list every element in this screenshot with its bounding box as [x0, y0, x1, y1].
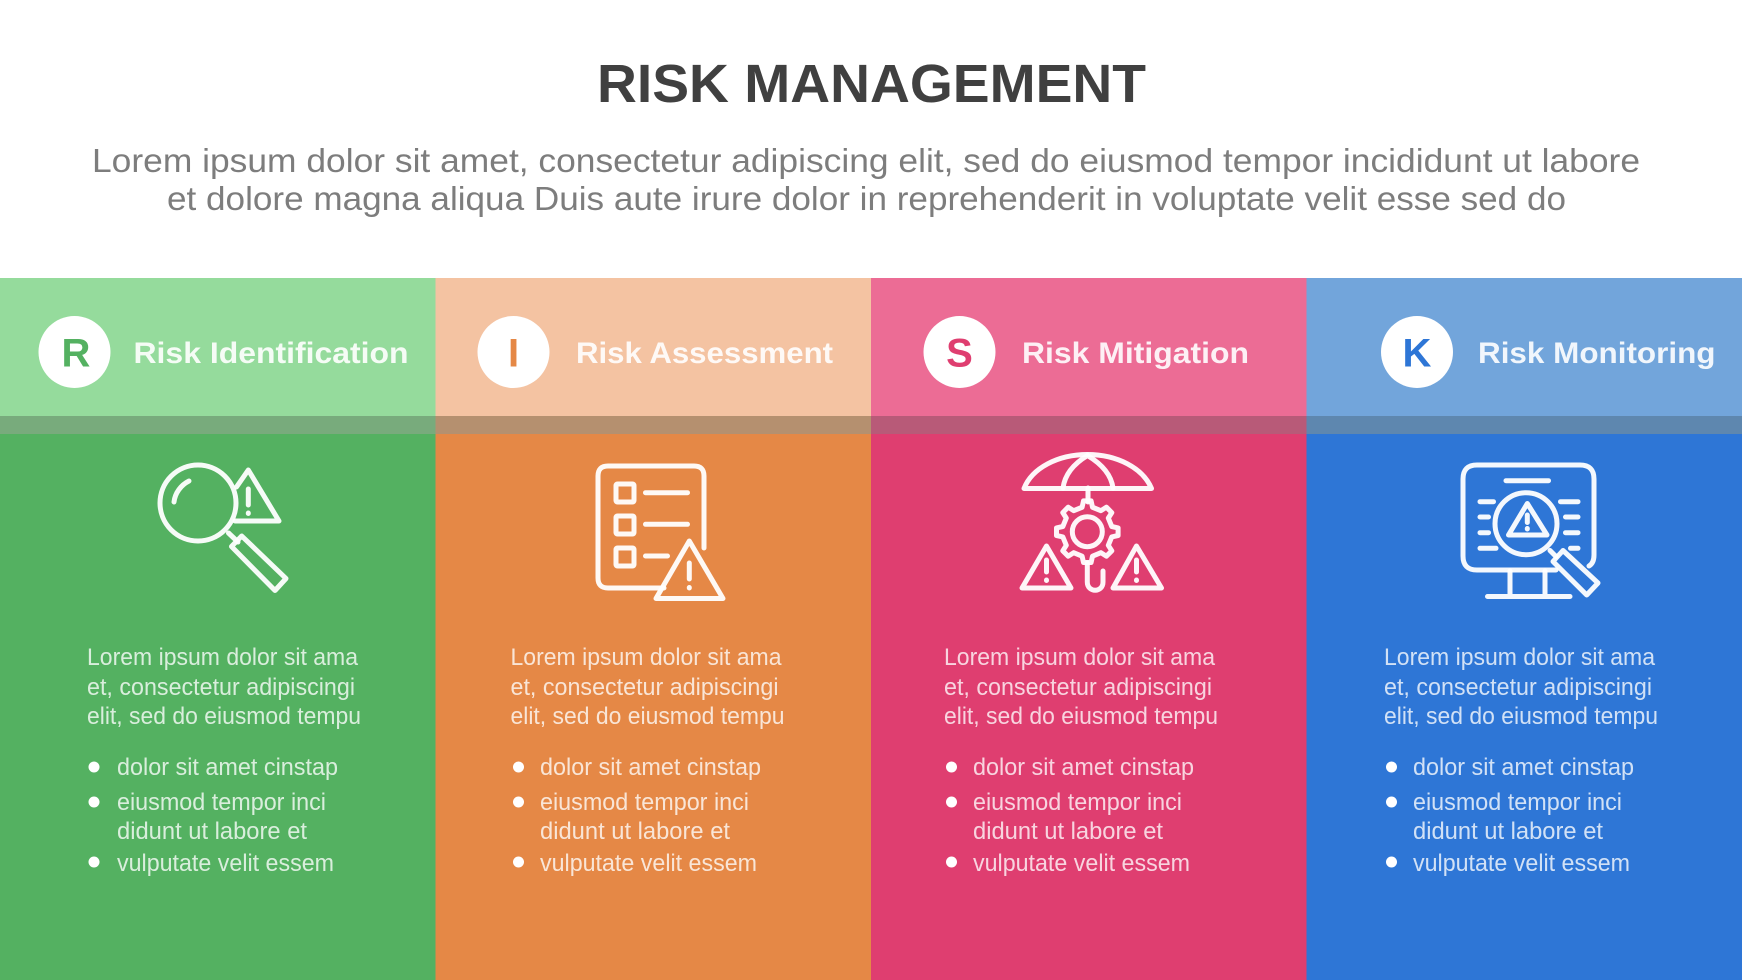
header: risk monitoring: Risk Monitoring: [1478, 337, 1716, 370]
header: risk mitigation: S: [946, 332, 973, 376]
icon: umbrella, gear and warnings: [1022, 454, 1162, 590]
body text: elit, sed do eiusmod tempu: [87, 703, 361, 730]
bullet list: [88, 754, 338, 877]
header: risk identification: R: [62, 332, 91, 376]
panel: risk monitoring: [1306, 278, 1742, 980]
panel: risk mitigation: [871, 278, 1307, 980]
body text: et, consectetur adipiscingi: [1384, 674, 1652, 701]
header: risk monitoring: [1381, 316, 1716, 388]
subtitle text: Lorem ipsum dolor sit amet, consectetur adipiscing elit, sed do eiusmod tempor incididunt ut labore: [92, 142, 1640, 179]
bullet list: vulputate velit essem: [117, 850, 334, 877]
bullet list: didunt ut labore et: [540, 818, 730, 845]
bullet list: eiusmod tempor inci: [117, 789, 326, 816]
body text: elit, sed do eiusmod tempu: [1384, 703, 1658, 730]
bullet list: dolor sit amet cinstap: [540, 754, 761, 781]
bullet list: [513, 754, 761, 877]
bullet list: [1386, 754, 1634, 877]
icon: checklist with warning: [598, 466, 723, 598]
body text: [510, 644, 784, 730]
title: RISK MANAGEMENT: [597, 54, 1146, 114]
header: risk assessment: I: [508, 332, 519, 376]
bullet list: [946, 754, 1194, 877]
header: risk mitigation: Risk Mitigation: [1022, 337, 1249, 370]
body text: Lorem ipsum dolor sit ama: [1384, 644, 1655, 671]
header: risk assessment: Risk Assessment: [576, 337, 833, 370]
subtitle text: [92, 142, 1640, 217]
icon: monitor with magnifier and warning: [1463, 465, 1598, 596]
panel: risk identification: [0, 278, 436, 980]
body text: elit, sed do eiusmod tempu: [944, 703, 1218, 730]
bullet list: dolor sit amet cinstap: [117, 754, 338, 781]
bullet list: didunt ut labore et: [117, 818, 307, 845]
body text: et, consectetur adipiscingi: [510, 674, 778, 701]
bullet list: vulputate velit essem: [1413, 850, 1630, 877]
bullet list: didunt ut labore et: [1413, 818, 1603, 845]
bullet list: didunt ut labore et: [973, 818, 1163, 845]
bullet list: eiusmod tempor inci: [1413, 789, 1622, 816]
body text: et, consectetur adipiscingi: [87, 674, 355, 701]
body text: et, consectetur adipiscingi: [944, 674, 1212, 701]
bullet list: dolor sit amet cinstap: [973, 754, 1194, 781]
body text: Lorem ipsum dolor sit ama: [944, 644, 1215, 671]
header: risk monitoring: K: [1403, 332, 1432, 376]
panel: risk assessment: [436, 278, 872, 980]
header: risk identification: Risk Identification: [134, 337, 408, 370]
bullet list: vulputate velit essem: [540, 850, 757, 877]
bullet list: eiusmod tempor inci: [973, 789, 1182, 816]
body text: [87, 644, 361, 730]
bullet list: dolor sit amet cinstap: [1413, 754, 1634, 781]
body text: Lorem ipsum dolor sit ama: [87, 644, 358, 671]
body text: Lorem ipsum dolor sit ama: [510, 644, 782, 671]
icon: magnifier with warning: [160, 465, 286, 590]
bullet list: vulputate velit essem: [973, 850, 1190, 877]
body text: [1384, 644, 1658, 730]
header: risk assessment: [478, 316, 833, 388]
header: risk identification: [38, 316, 408, 388]
bullet list: eiusmod tempor inci: [540, 789, 749, 816]
header: risk mitigation: [924, 316, 1249, 388]
subtitle text: et dolore magna aliqua Duis aute irure dolor in reprehenderit in voluptate velit esse sed do: [167, 180, 1566, 217]
body text: elit, sed do eiusmod tempu: [510, 703, 784, 730]
body text: [944, 644, 1218, 730]
